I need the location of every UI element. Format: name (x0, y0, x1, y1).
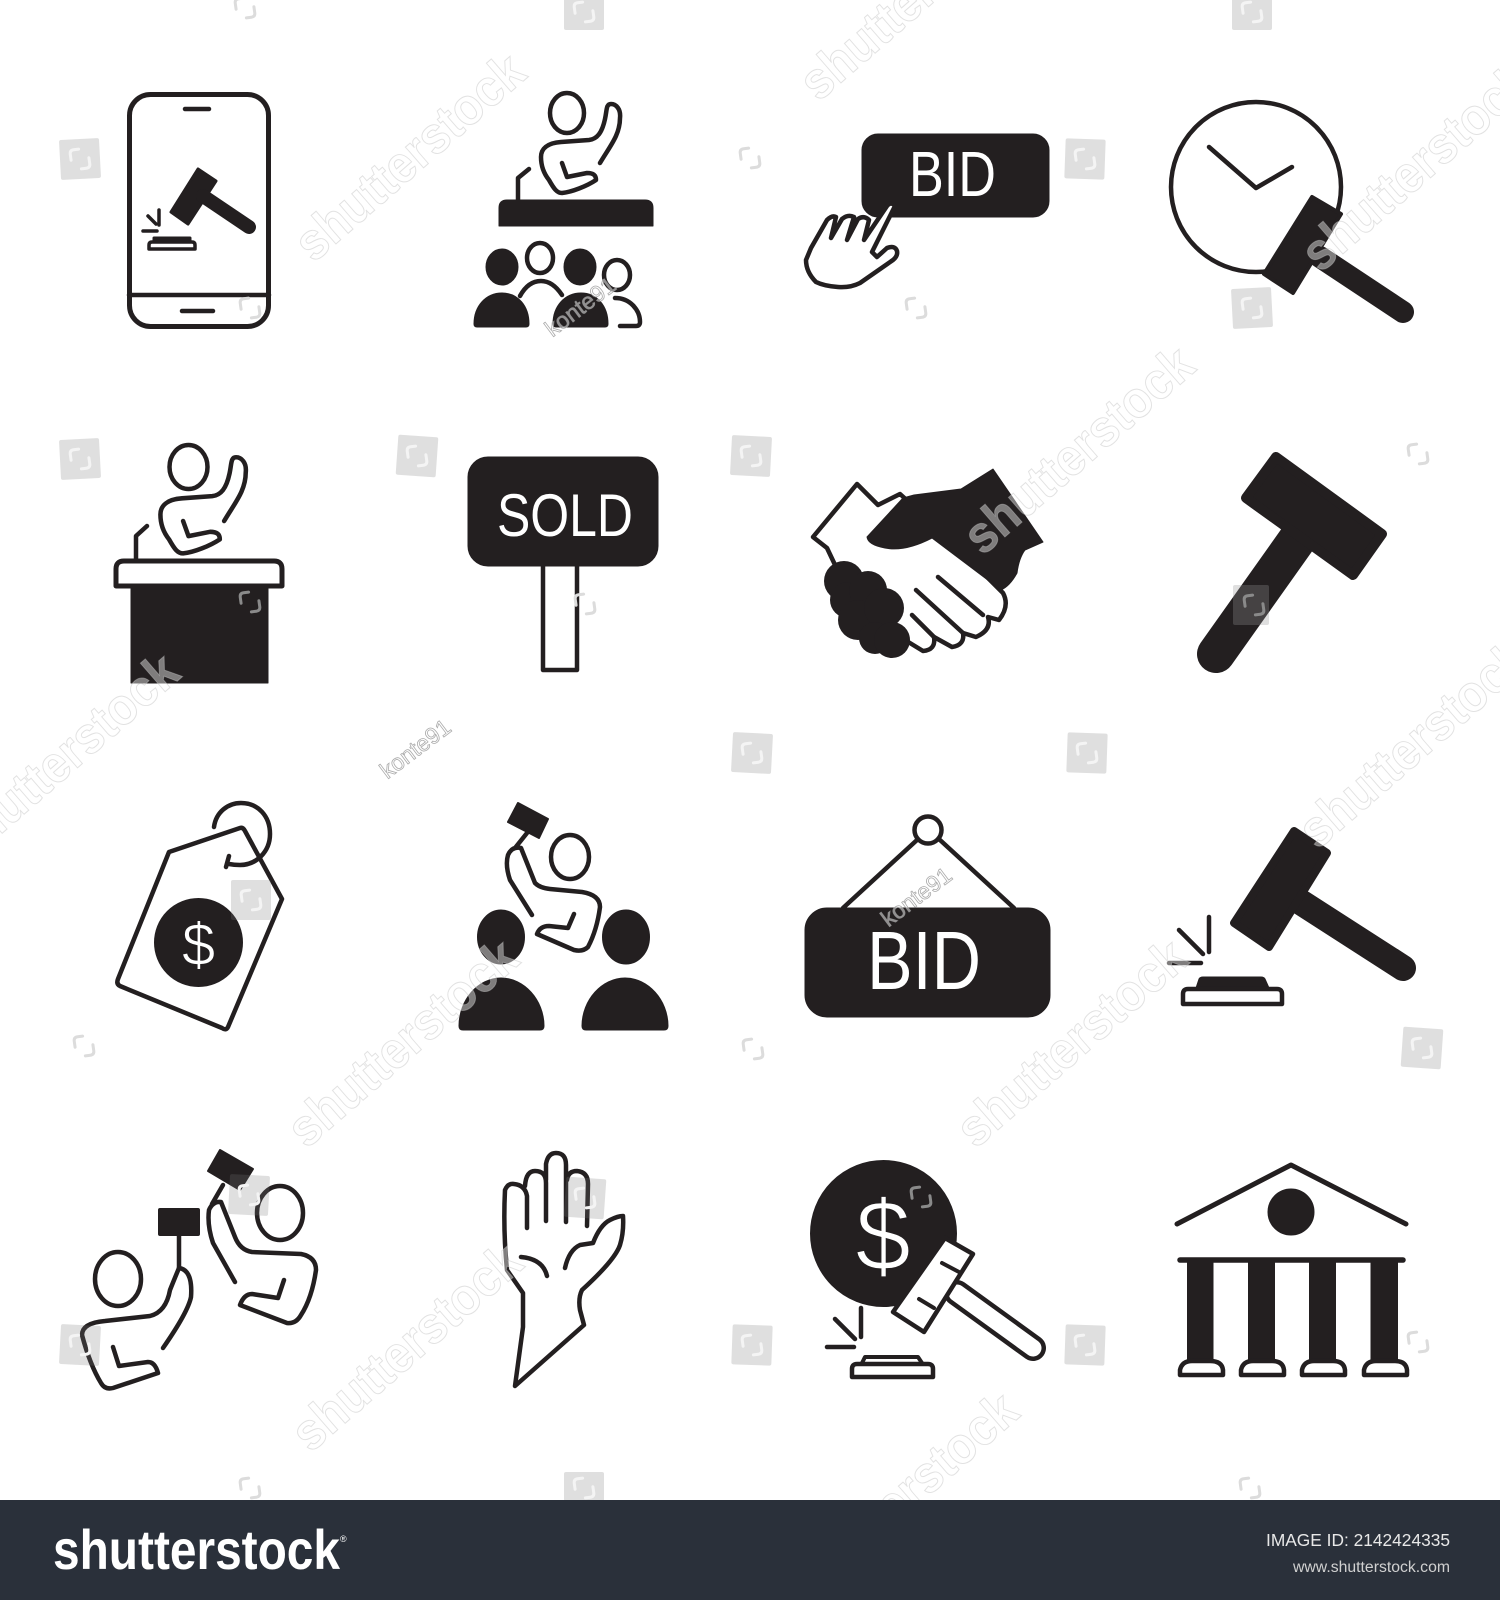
watermark layer: shutterstock (283, 42, 536, 273)
icon: hanging BID sign (805, 816, 1050, 1017)
icon: gavel striking block (1169, 831, 1403, 1004)
icon: hand pressing BID button: BID (909, 138, 996, 210)
watermark layer: konte91 (540, 272, 621, 342)
footer bar (0, 1500, 1500, 1600)
icon: clock with gavel (1171, 102, 1403, 312)
icon: auctioneer at podium (116, 445, 282, 683)
icon: gavel (1216, 457, 1382, 654)
icon: hand pressing BID button (806, 134, 1049, 287)
icon: two bidders raising paddles (82, 1150, 316, 1388)
bidder: upper right (208, 1150, 316, 1323)
icon: raised hand (504, 1153, 623, 1386)
icon: smartphone with gavel (129, 94, 269, 326)
footer: image id: IMAGE ID: 2142424335 (1266, 1530, 1450, 1550)
icon: bidder raising gavel among people (459, 803, 668, 1030)
icon: gavel with dollar coin (810, 1160, 1033, 1377)
watermark layer: shutterstock (952, 335, 1205, 566)
watermark layer: konte91 (375, 714, 456, 784)
icon: auctioneer and crowd (474, 93, 653, 327)
icon: SOLD sign (468, 457, 658, 670)
footer: registered mark: ® (340, 1534, 347, 1544)
icon: gavel with dollar coin: $ (855, 1180, 911, 1292)
icon: handshake (813, 469, 1043, 658)
watermark layer: shutterstock (280, 1232, 533, 1463)
icon: classical bank building (1177, 1165, 1407, 1375)
watermark layer: konte91 (876, 862, 957, 932)
watermark layer: shutterstock (276, 928, 529, 1159)
icon: price tag with dollar: $ (182, 911, 215, 978)
footer: shutterstock wordmark: shutterstock (53, 1518, 341, 1581)
icon: SOLD sign: SOLD (497, 482, 633, 549)
icon: hanging BID sign: BID (867, 914, 981, 1007)
footer: website: www.shutterstock.com (1292, 1559, 1450, 1576)
icon: price tag with dollar (117, 803, 282, 1029)
bidder: lower left (82, 1209, 199, 1388)
watermark layer: shutterstock (945, 928, 1198, 1159)
